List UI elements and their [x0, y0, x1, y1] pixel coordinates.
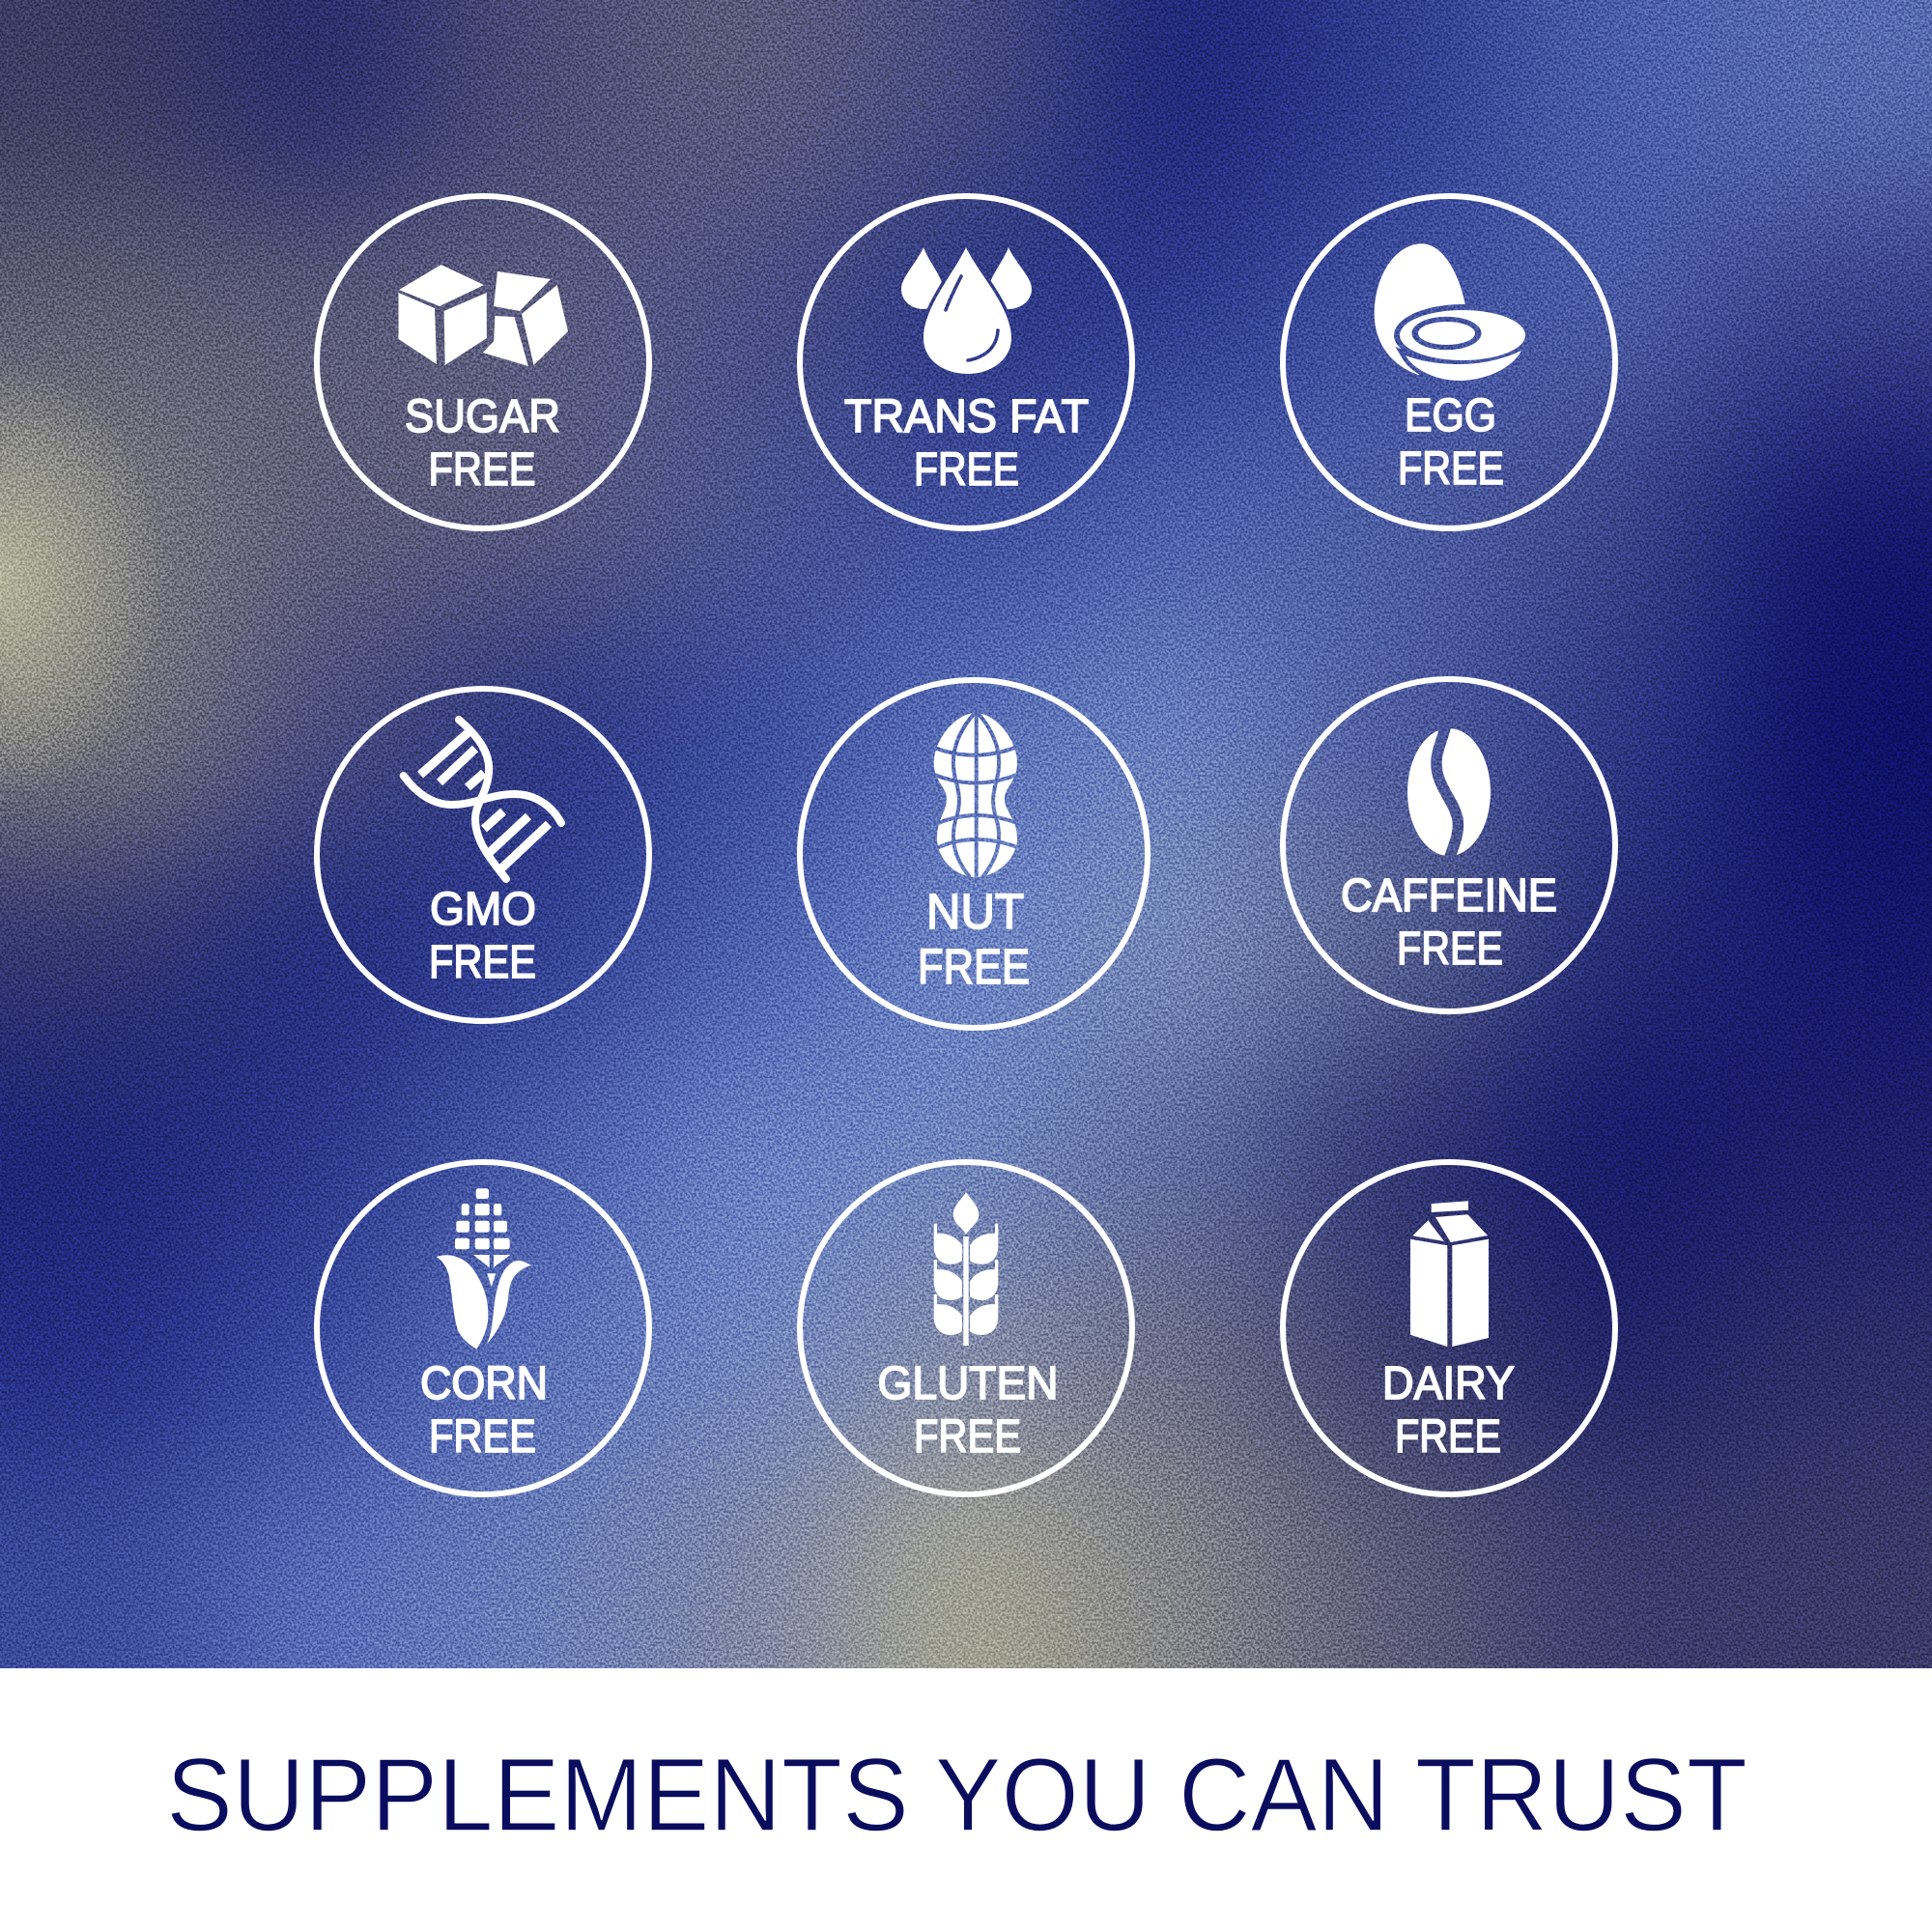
icon: egg	[1372, 242, 1528, 383]
label: caffeine free	[1341, 870, 1557, 975]
label: trans fat free	[844, 391, 1089, 496]
icon: coffee bean	[1406, 727, 1492, 857]
badge: caffeine free	[1283, 679, 1615, 1011]
label: trans fat free: TRANS FAT	[844, 391, 1089, 442]
label: nut free	[918, 884, 1030, 994]
icon: dna helix	[404, 720, 561, 879]
footer white band	[0, 1668, 1932, 1932]
icon: peanut	[932, 711, 1019, 879]
label: caffeine free: CAFFEINE	[1341, 870, 1557, 922]
footer heading: SUPPLEMENTS YOU CAN TRUST	[166, 1736, 1747, 1853]
badge: egg free	[1283, 196, 1615, 528]
badge: trans fat free	[800, 196, 1132, 528]
label: egg free: FREE	[1398, 443, 1504, 495]
label: trans fat free: FREE	[914, 444, 1019, 496]
badge: gluten free	[800, 1162, 1132, 1494]
icon: milk carton	[1410, 1201, 1489, 1347]
label: dairy free	[1382, 1358, 1515, 1463]
label: dairy free: FREE	[1395, 1411, 1501, 1463]
badge: sugar free	[317, 196, 649, 528]
label: gluten free: GLUTEN	[877, 1358, 1059, 1409]
badge: gmo free	[317, 689, 649, 1021]
icon: oil drops	[901, 247, 1032, 374]
icon: wheat	[934, 1192, 998, 1346]
icon: sugar cubes	[398, 265, 568, 366]
label: dairy free: DAIRY	[1382, 1358, 1515, 1409]
label: corn free	[420, 1358, 548, 1463]
label: sugar free	[405, 391, 560, 496]
label: gluten free	[877, 1358, 1059, 1463]
label: gluten free: FREE	[914, 1411, 1021, 1463]
label: gmo free: GMO	[430, 884, 536, 935]
label: corn free: CORN	[420, 1358, 548, 1409]
label: sugar free: FREE	[429, 444, 535, 496]
label: nut free: FREE	[918, 939, 1030, 994]
badge: dairy free	[1283, 1162, 1615, 1494]
label: gmo free: FREE	[429, 937, 536, 988]
label: egg free	[1398, 390, 1504, 495]
label: nut free: NUT	[926, 884, 1024, 939]
label: egg free: EGG	[1405, 390, 1496, 441]
badge: nut free	[800, 680, 1148, 1028]
label: caffeine free: FREE	[1397, 923, 1503, 975]
label: corn free: FREE	[429, 1411, 536, 1463]
icon: corn cob	[437, 1188, 531, 1350]
label: gmo free	[429, 884, 536, 988]
badge: corn free	[317, 1162, 649, 1494]
label: sugar free: SUGAR	[405, 391, 560, 442]
